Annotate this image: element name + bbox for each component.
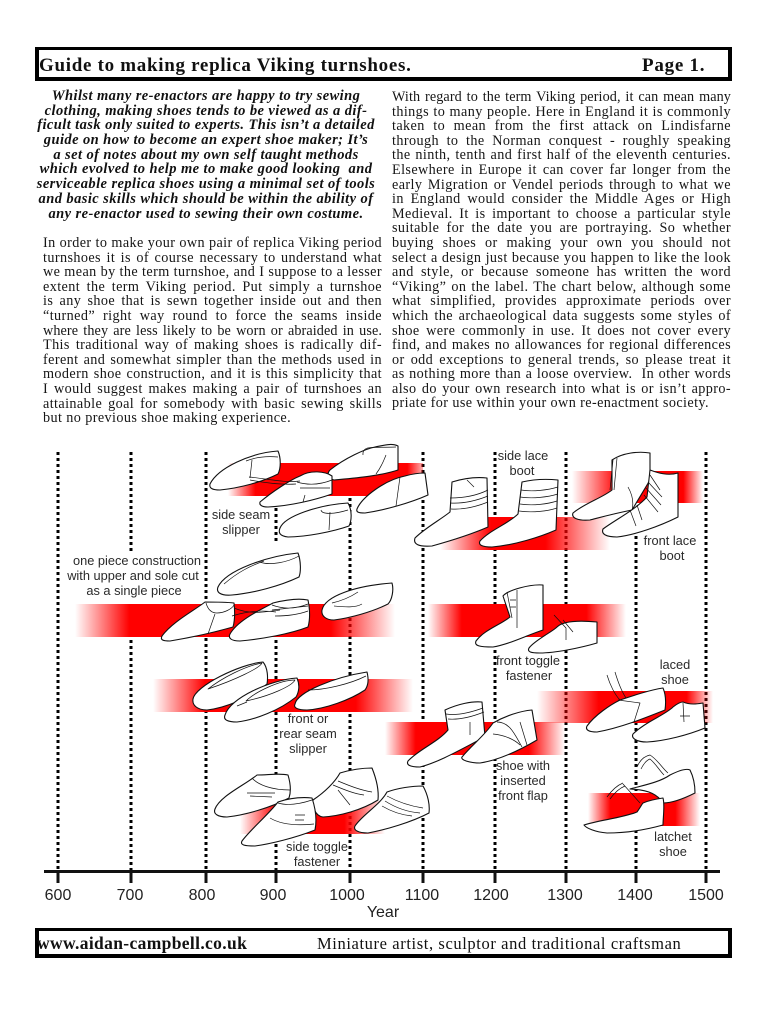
intro text block: ficult task only suited to experts. This isn’t a detailed	[37, 117, 375, 133]
label: one piece construction: as a single piece	[86, 583, 182, 598]
intro text block: serviceable replica shoes using a minimal set of tools	[37, 176, 375, 192]
time axis: 1200	[473, 887, 509, 904]
label: front or rear seam slipper: front or	[288, 711, 328, 726]
left body text: we mean by the term turnshoe, and I suppose to a lesser	[43, 264, 382, 280]
left body text: where they are less likely to be worn or abraided in use.	[43, 323, 382, 339]
left body text: In order to make your own pair of replica Viking period	[43, 235, 382, 251]
right body text: Medieval. It is important to choose a particular style	[392, 206, 731, 222]
shoes: latchet shoe group	[584, 755, 695, 833]
label: one piece construction: one piece construction	[73, 553, 201, 568]
shoes: shoe with inserted front flap group	[408, 702, 537, 767]
right body text: suitable for the date you are portraying. So whether	[392, 220, 731, 236]
label: front or rear seam slipper: slipper	[289, 741, 328, 756]
right body text: and style, or because someone has written the word	[392, 264, 731, 280]
right body text: the ninth, tenth and first half of the eleventh centuries.	[392, 147, 731, 163]
label: shoe with inserted front flap: shoe with	[496, 758, 550, 773]
left body text: ferent and somewhat simpler than the methods used in	[43, 352, 382, 368]
right body text: With regard to the term Viking period, it can mean many	[392, 89, 731, 105]
tagline: Miniature artist, sculptor and traditional craftsman	[317, 934, 681, 953]
footer bar	[35, 928, 732, 958]
left body text: I would suggest makes making a pair of turnshoes an	[43, 381, 382, 397]
right body text: taken to mean from the first attack on Lindisfarne	[392, 118, 731, 134]
intro text block: which evolved to help me to make good looking and	[40, 161, 372, 177]
red period bands	[75, 463, 713, 834]
time axis	[44, 871, 724, 921]
right body text: also do your own research into what is or isn’t appro-	[392, 381, 731, 397]
title: Guide to making replica Viking turnshoes.	[39, 55, 412, 76]
intro text block: any re-enactor used to sewing their own costume.	[48, 206, 364, 222]
label: latchet shoe: shoe	[659, 844, 687, 859]
label: side lace boot: side lace	[498, 448, 548, 463]
time axis: 1000	[329, 887, 365, 904]
time axis: 1400	[617, 887, 653, 904]
label: front lace boot: front lace	[644, 533, 696, 548]
right body text	[392, 89, 731, 411]
right body text: Elsewhere in Europe it can cover far longer from the	[392, 162, 731, 178]
right body text: “Viking” on the label. The chart below, although some	[392, 279, 731, 295]
label: side seam slipper: side seam	[212, 507, 270, 522]
left body text	[43, 235, 382, 426]
label: shoe with inserted front flap: front flap	[498, 788, 548, 803]
intro text block: and basic skills which should be within the ability of	[39, 191, 373, 207]
label: front lace boot: boot	[660, 548, 685, 563]
right body text: shoe were commonly in use. It does not cover every	[392, 322, 731, 338]
left body text: modern shoe construction, and it is this simplicity that	[43, 366, 382, 382]
left body text: turnshoes it is of course necessary to understand what	[43, 250, 382, 266]
shoes: side lace boot group	[415, 478, 558, 547]
time axis: Year	[367, 904, 400, 921]
time axis: 1300	[547, 887, 583, 904]
shoes: side toggle fastener group	[215, 768, 429, 846]
intro text block	[36, 88, 375, 222]
time axis: 700	[117, 887, 143, 904]
label: latchet shoe: latchet	[654, 829, 692, 844]
right body text: in England would consider the Middle Ages or High	[392, 191, 731, 207]
right body text: select a design just because you happen to like the look	[392, 250, 731, 266]
intro text block: guide on how to become an expert shoe maker; It’s	[44, 132, 368, 148]
right body text: find, and makes no allowances for regional differences	[392, 337, 731, 353]
left body text: attainable goal for somebody with basic sewing skills	[43, 396, 382, 412]
shoes: front or rear seam slipper group	[193, 662, 368, 722]
label: side toggle fastener: fastener	[294, 854, 341, 869]
label: side lace boot: boot	[510, 463, 535, 478]
website: www.aidan-campbell.co.uk	[37, 933, 247, 953]
right body text: or odd exceptions to general trends, so please treat it	[392, 352, 731, 368]
left body text: extent the term Viking period. Put simply a turnshoe	[43, 279, 382, 295]
left body text: is any shoe that is sewn together inside out and then	[43, 293, 382, 309]
right body text: as nothing more than a loose overview. In other words	[392, 366, 731, 382]
right body text: which the archaeological data suggests some styles of	[392, 308, 731, 324]
time axis: 900	[260, 887, 286, 904]
shoes: front lace boot group	[573, 452, 678, 537]
label: laced shoe: laced	[660, 657, 690, 672]
intro text block: clothing, making shoes tends to be viewed as a dif-	[45, 103, 367, 119]
label: shoe with inserted front flap: inserted	[500, 773, 546, 788]
right body text: things to many people. Here in England it is commonly	[392, 104, 731, 120]
right body text: through to the Norman conquest - roughly speaking	[392, 133, 731, 149]
label: front toggle fastener: fastener	[506, 668, 553, 683]
shoes: laced shoe group	[586, 672, 705, 742]
label: side seam slipper: slipper	[222, 522, 261, 537]
right body text: buying shoes or making your own you should not	[392, 235, 731, 251]
label: one piece construction: with upper and sole cut	[66, 568, 199, 583]
dotted century grid lines	[58, 452, 706, 871]
intro text block: Whilst many re-enactors are happy to try sewing	[52, 88, 360, 104]
time axis: 800	[189, 887, 215, 904]
right body text: priate for use within your own re-enactment society.	[392, 395, 709, 411]
page number: Page 1.	[642, 55, 705, 76]
shoes: side seam slipper group	[210, 444, 428, 537]
left body text: but no previous shoe making experience.	[43, 410, 291, 426]
shoes: front toggle fastener group	[476, 585, 597, 653]
header bar	[35, 47, 732, 81]
label: laced shoe: shoe	[661, 672, 689, 687]
time axis: 1100	[405, 887, 439, 904]
label: front toggle fastener: front toggle	[496, 653, 560, 668]
intro text block: a set of notes about my own self taught methods	[53, 147, 359, 163]
right body text: early Migration or Vendel periods through to what we	[392, 177, 731, 193]
left body text: “turned” right way round to force the seams inside	[43, 308, 382, 324]
label: side toggle fastener: side toggle	[286, 839, 348, 854]
time axis: 1500	[688, 887, 724, 904]
shoes: one piece construction group	[161, 553, 393, 641]
time axis: 600	[45, 887, 71, 904]
left body text: This traditional way of making shoes is radically dif-	[43, 337, 382, 353]
right body text: what simplified, provides approximate periods over	[392, 293, 731, 309]
label: front or rear seam slipper: rear seam	[279, 726, 337, 741]
